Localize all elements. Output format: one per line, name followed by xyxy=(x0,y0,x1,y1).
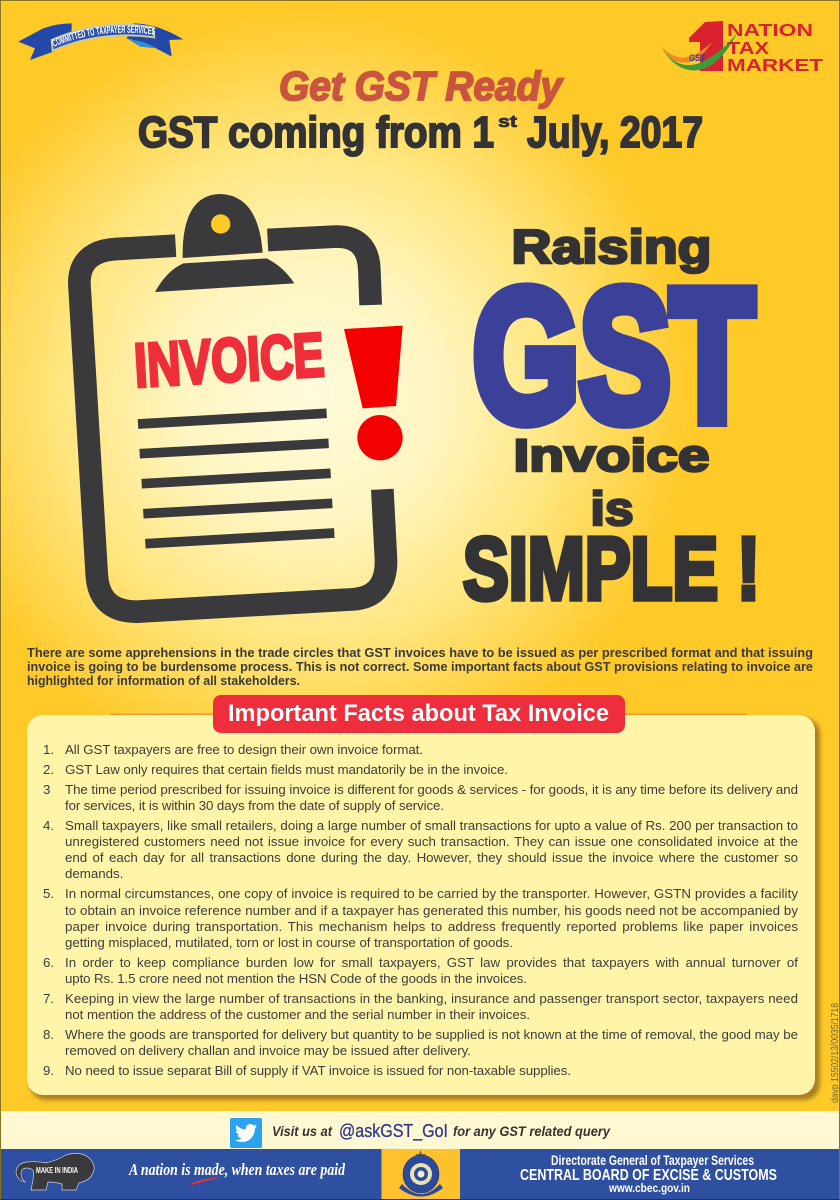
fact 8 xyxy=(43,1027,798,1058)
intro paragraph: There are some apprehensions in the trade circles that GST invoices have to be issued as per prescribed format and that issuing xyxy=(27,645,813,660)
logo: one nation one tax one market: TAX xyxy=(727,38,769,58)
fact 5 xyxy=(43,886,798,950)
fact 5: getting misplaced, mutilated, torn or lost in course of transportation of goods. xyxy=(65,935,513,950)
fact 6: 6. xyxy=(43,955,54,970)
logo: one nation one tax one market: NATION xyxy=(727,20,813,40)
logo: make in india lion: MAKE IN INDIA xyxy=(36,1166,78,1175)
footer band xyxy=(0,1149,840,1200)
fact 5: 5. xyxy=(43,886,54,901)
fact 4: 4. xyxy=(43,818,54,833)
fact 7: not mention the address of the customer and the serial number in their invoices. xyxy=(65,1007,530,1022)
fact 4: demands. xyxy=(65,866,123,881)
fact 7: Keeping in view the large number of transactions in the banking, insurance and passenger transport sector, taxpayers need xyxy=(65,991,798,1006)
fact 8: removed on delivery challan and invoice may be issued after delivery. xyxy=(65,1043,471,1058)
fact 8: Where the goods are transported for delivery but quantity to be supplied is not known at the time of removal, the good may be xyxy=(65,1027,798,1042)
department text: CENTRAL BOARD OF EXCISE & CUSTOMS xyxy=(520,1167,777,1184)
fact 4 xyxy=(43,818,798,881)
is: is xyxy=(590,482,634,535)
intro paragraph xyxy=(27,645,813,688)
logo: make in india lion xyxy=(16,1153,94,1190)
subtitle: gst coming date: GST coming from 1 xyxy=(138,108,494,157)
band: twitter query: @askGST_GoI xyxy=(339,1120,448,1142)
band: twitter query: for any GST related query xyxy=(453,1123,611,1139)
text lines xyxy=(138,413,334,544)
logo: one nation one tax one market: GST xyxy=(689,53,705,63)
clipboard clip xyxy=(155,194,294,292)
fact 2: 2. xyxy=(43,762,54,777)
fact 8: 8. xyxy=(43,1027,54,1042)
logo: committed to taxpayer services ribbon: COMMITTED TO TAXPAYER SERVICES xyxy=(52,26,156,46)
tagline xyxy=(128,1160,345,1185)
raising: Raising xyxy=(512,220,712,273)
subtitle: gst coming date: July, 2017 xyxy=(527,108,703,157)
icon: twitter xyxy=(230,1118,262,1148)
heading: important facts about tax invoice xyxy=(213,695,625,733)
fact list xyxy=(43,742,798,1078)
subtitle: gst coming date: st xyxy=(498,112,517,131)
fact 4: unregistered customers need not issue invoice for every such transaction. They can issue one consolidated invoice at the xyxy=(65,834,798,849)
intro paragraph: invoice is going to be burdensome process. This is not correct. Some important facts about GST provisions relating to invoice are xyxy=(27,659,813,674)
fact 3: for services, it is within 30 days from the date of supply of service. xyxy=(65,798,444,813)
simple: SIMPLE ! xyxy=(463,519,760,618)
fact 5: to obtain an invoice reference number and if a taxpayer has generated this number, his goods need not be accompanied by xyxy=(65,903,798,918)
fact 7 xyxy=(43,991,798,1022)
fact 6 xyxy=(43,955,798,986)
title: get gst ready: Get GST Ready xyxy=(279,63,564,109)
fact 5: In normal circumstances, one copy of invoice is required to be carried by the transporter. However, GSTN provides a facility xyxy=(65,886,798,901)
fact 6: In order to keep compliance burden low for small taxpayers, GST law provides that taxpayers with annual turnover of xyxy=(65,955,798,970)
department text: www.cbec.gov.in xyxy=(608,1181,690,1195)
fact 9: 9. xyxy=(43,1063,54,1078)
panel: important facts xyxy=(27,695,820,1100)
fact 3 xyxy=(43,782,798,813)
fact 3: The time period prescribed for issuing invoice is different for goods & services - for goods, it is any time before its delivery and xyxy=(65,782,798,797)
icon: invoice clipboard xyxy=(79,194,403,612)
fact 1: All GST taxpayers are free to design their own invoice format. xyxy=(65,742,423,757)
emblem: cbec crest xyxy=(382,1149,460,1199)
tagline: A nation is made, when taxes are paid xyxy=(128,1160,345,1179)
department text xyxy=(520,1153,777,1195)
logo: committed to taxpayer services ribbon xyxy=(18,23,184,60)
fact 2: GST Law only requires that certain fields must mandatorily be in the invoice. xyxy=(65,762,508,777)
fact 6: upto Rs. 1.5 crore need not mention the HSN Code of the goods in the invoices. xyxy=(65,971,527,986)
fact 7: 7. xyxy=(43,991,54,1006)
band: twitter query xyxy=(1,1111,839,1149)
fact 1: 1. xyxy=(43,742,54,757)
fact 9: No need to issue separat Bill of supply if VAT invoice is issued for non-taxable supplies. xyxy=(65,1063,571,1078)
intro paragraph: highlighted for information of all stakeholders. xyxy=(27,673,300,688)
department text: Directorate General of Taxpayer Services xyxy=(551,1153,754,1168)
fact 3: 3 xyxy=(43,782,50,797)
logo: one nation one tax one market xyxy=(661,20,823,75)
fact 5: paper invoice during transportation. This mechanism helps to address frequently reported problems like paper invoices xyxy=(65,919,798,934)
invoice label: INVOICE xyxy=(132,321,326,401)
band: twitter query: Visit us at xyxy=(272,1123,333,1139)
headline: raising gst invoice is simple xyxy=(463,220,760,618)
fact 4: Small taxpayers, like small retailers, doing a large number of small transactions for upto a value of Rs. 200 per transaction to xyxy=(65,818,798,833)
logo: one nation one tax one market: MARKET xyxy=(727,55,823,75)
fact 4: end of each day for all transactions done during the day. However, they should issue the invoice where the customer so xyxy=(65,850,798,865)
invoice: Invoice xyxy=(514,430,710,481)
clipboard outline xyxy=(79,237,386,612)
heading: important facts about tax invoice: Important Facts about Tax Invoice xyxy=(228,700,609,727)
icon: exclamation mark xyxy=(344,326,403,460)
